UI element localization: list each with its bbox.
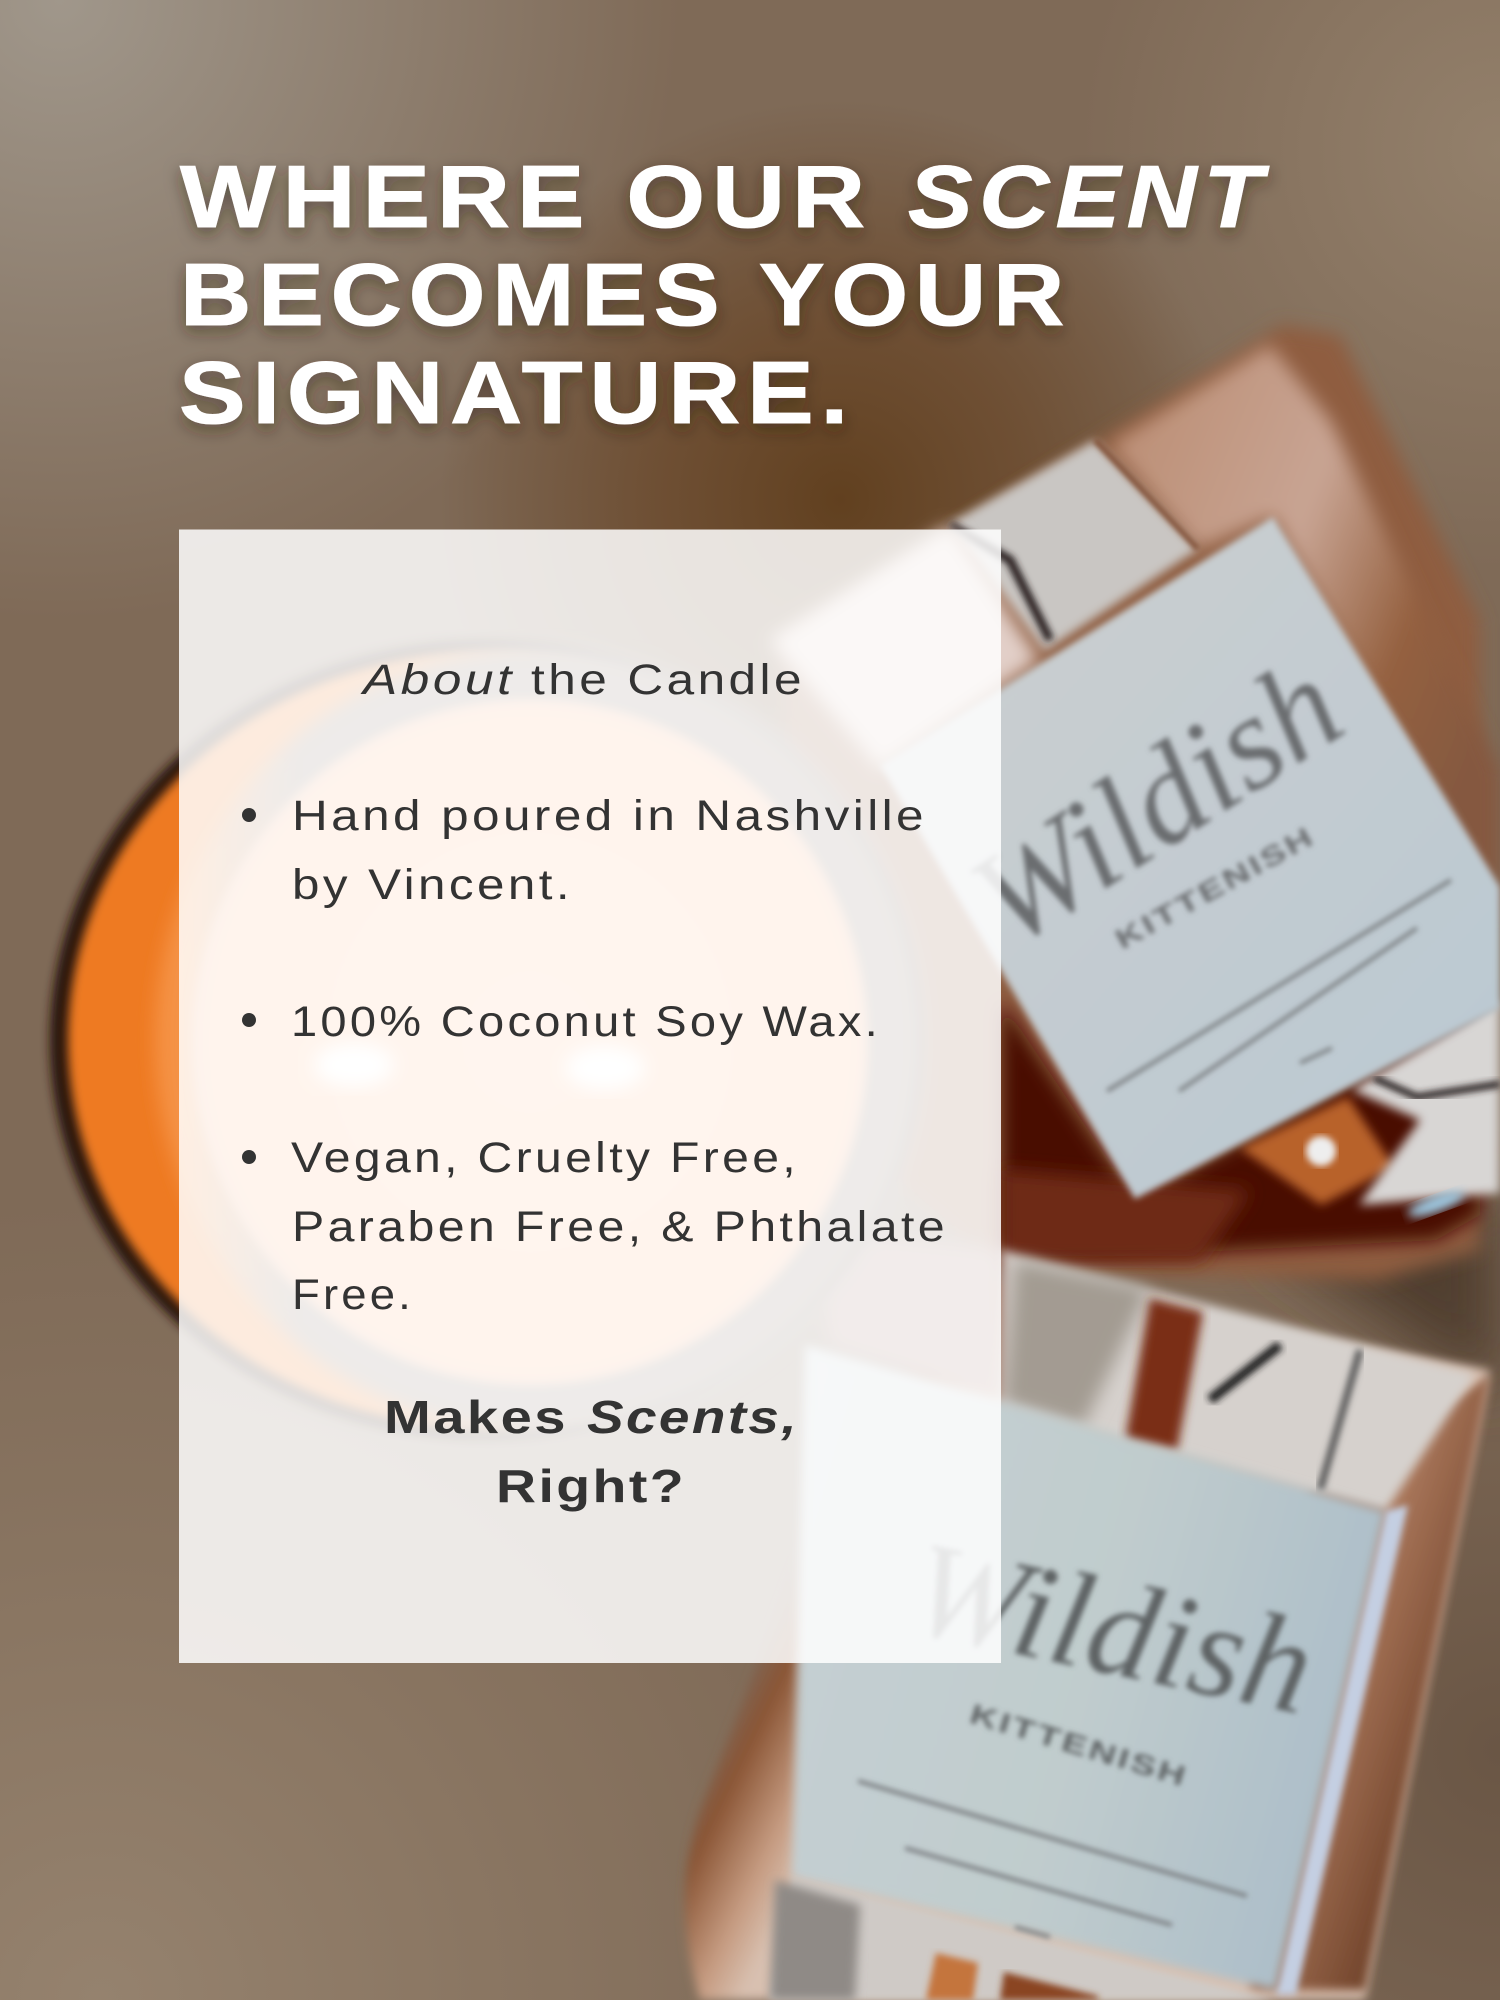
title: SIGNATURE. bbox=[179, 343, 855, 442]
heading: About the Candle bbox=[359, 656, 805, 704]
card lettering: Wildish by Kittenish bbox=[858, 1514, 1326, 1937]
closing line: Makes Scents, Right?: Scents, bbox=[587, 1391, 799, 1443]
heading: About the Candle: About bbox=[359, 656, 515, 704]
title: BECOMES YOUR bbox=[180, 245, 1071, 344]
bullet: vegan and free-from claims: Paraben Free, & Phthalate bbox=[292, 1203, 948, 1251]
panel background bbox=[179, 530, 1001, 1663]
card lettering: Wildish by Kittenish: Wildish bbox=[946, 630, 1367, 975]
title: WHERE OUR bbox=[180, 147, 872, 246]
card lettering: Wildish by Kittenish: Wildish bbox=[899, 1514, 1326, 1744]
heading: About the Candle: the Candle bbox=[531, 656, 805, 704]
card lettering: Wildish by Kittenish: KITTENISH bbox=[966, 1698, 1192, 1793]
card lettering: Wildish by Kittenish: KITTENISH bbox=[1110, 820, 1320, 955]
candle in glass jar bbox=[50, 640, 925, 1440]
closing line: Makes Scents, Right?: Right? bbox=[496, 1460, 686, 1512]
title bbox=[179, 147, 1269, 442]
bullet: vegan and free-from claims: Free. bbox=[292, 1271, 414, 1319]
bullet: hand poured: by Vincent. bbox=[292, 861, 573, 909]
lower box with Wildish card bbox=[685, 1230, 1490, 2000]
bullet: hand poured: Hand poured in Nashville bbox=[292, 792, 927, 840]
closing line: Makes Scents, Right? bbox=[384, 1391, 799, 1512]
panel: about the candle bbox=[179, 530, 1001, 1663]
bullet: hand poured bbox=[242, 792, 927, 909]
card lettering: Wildish by Kittenish bbox=[946, 630, 1451, 1091]
title: SCENT bbox=[908, 147, 1269, 246]
bullet: vegan and free-from claims: Vegan, Cruelty Free, bbox=[291, 1134, 799, 1182]
bullet: coconut soy wax: 100% Coconut Soy Wax. bbox=[291, 998, 881, 1046]
closing line: Makes Scents, Right?: Makes bbox=[384, 1391, 568, 1443]
upper box with Wildish card bbox=[770, 325, 1500, 1280]
bullet: vegan and free-from claims bbox=[242, 1134, 948, 1319]
